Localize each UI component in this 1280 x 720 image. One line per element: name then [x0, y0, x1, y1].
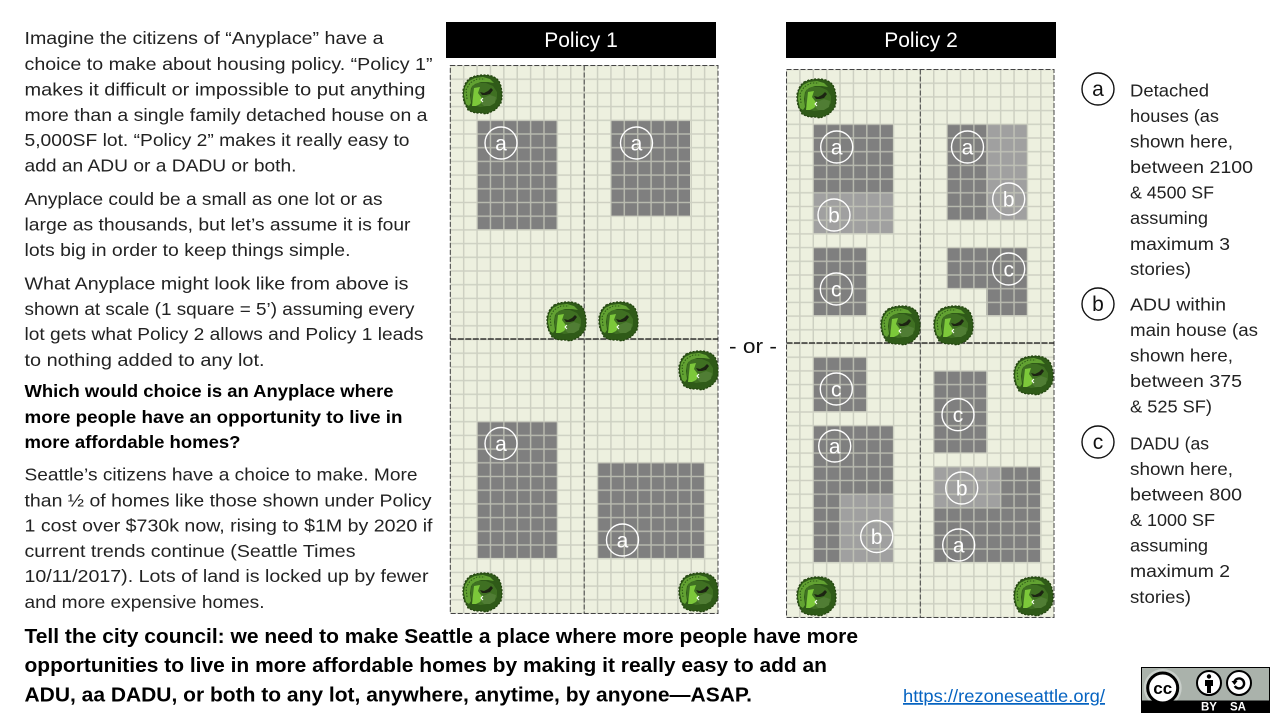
panel: Policy 1 site plan — [450, 66, 718, 614]
call to action: ADU, aa DADU, or both to any lot, anywhere, anytime, by anyone—ASAP. — [24, 684, 752, 706]
paragraph: view from above: shown at scale (1 square = 5’) assuming every — [24, 299, 415, 319]
heading: Policy 2: Policy 2 — [884, 29, 958, 52]
label c: c — [1003, 258, 1014, 282]
panel: Policy 2 site plan — [786, 70, 1054, 618]
paragraph: Seattle's choice: and more expensive homes. — [24, 592, 264, 612]
legend item b — [1082, 288, 1258, 416]
legend item c: between 800 — [1130, 484, 1242, 504]
paragraph: size of Anyplace — [24, 189, 411, 260]
bold question — [24, 381, 402, 452]
legend item a: between 2100 — [1130, 157, 1253, 177]
icon: CC BY-SA badge: BY — [1201, 702, 1217, 714]
icon: tree — [463, 75, 502, 114]
top right lot buildings — [947, 124, 1027, 315]
house a, top left lot — [477, 121, 557, 229]
legend item b: ADU within — [1130, 294, 1226, 314]
label a: a — [495, 433, 507, 456]
legend item c: shown here, — [1130, 459, 1233, 479]
legend item a: stories) — [1130, 259, 1191, 279]
paragraph: view from above: What Anyplace might look like from above is — [24, 273, 409, 293]
intro paragraph: more than a single family detached house on a — [24, 105, 428, 125]
label a: a — [953, 534, 965, 558]
icon: tree — [599, 302, 638, 341]
label b: b — [1003, 188, 1015, 212]
label b — [818, 199, 850, 231]
icon: tree — [881, 306, 920, 345]
label b: b — [871, 526, 883, 549]
intro paragraph — [24, 28, 433, 176]
legend item b: & 525 SF) — [1130, 396, 1212, 416]
label a: a — [829, 436, 841, 458]
legend item a: Detached — [1130, 81, 1209, 101]
legend item c: c — [1093, 431, 1103, 454]
icon: tree — [934, 306, 973, 345]
paragraph: Seattle's choice: 10/11/2017). Lots of land is locked up by fewer — [24, 566, 429, 586]
label a — [943, 529, 975, 561]
label a: a — [631, 132, 643, 156]
label c: c — [831, 378, 842, 402]
label a — [485, 127, 517, 159]
bottom right lot buildings — [934, 371, 1040, 562]
paragraph: Seattle's choice: current trends continue (Seattle Times — [24, 541, 356, 561]
legend item a — [1082, 73, 1253, 279]
legend item c: stories) — [1130, 587, 1191, 607]
icon: tree — [1014, 356, 1053, 395]
icon: CC BY-SA badge: SA — [1230, 702, 1246, 714]
icon: tree — [1014, 577, 1053, 616]
legend item b: between 375 — [1130, 371, 1242, 391]
label c: c — [953, 404, 963, 427]
legend item c: DADU (as — [1130, 434, 1209, 454]
heading: Policy 2 — [786, 22, 1056, 58]
label a — [819, 430, 851, 462]
label b — [993, 183, 1025, 215]
link: https://rezoneseattle.org/ — [903, 686, 1105, 706]
paragraph: view from above — [24, 273, 424, 370]
paragraph: view from above: lot gets what Policy 2 allows and Policy 1 leads — [24, 324, 424, 344]
house a, bottom left lot — [477, 422, 557, 558]
intro paragraph: Imagine the citizens of “Anyplace” have a — [24, 28, 384, 48]
label a — [606, 524, 638, 556]
paragraph: view from above: to nothing added to any lot. — [24, 350, 264, 370]
icon: tree — [679, 351, 718, 390]
paragraph: Seattle's choice: 1 cost over $730k now, rising to $1M by 2020 if — [24, 516, 433, 536]
label b: b — [828, 204, 840, 228]
icon: CC BY-SA badge — [1142, 668, 1270, 714]
label a — [620, 127, 652, 159]
heading: Policy 1 — [446, 22, 716, 58]
label b — [946, 472, 978, 504]
legend item b: shown here, — [1130, 346, 1233, 366]
paragraph: Seattle's choice — [24, 465, 433, 612]
legend item b: main house (as — [1130, 320, 1258, 340]
separator: or: - or - — [729, 336, 777, 358]
bold question: more affordable homes? — [24, 432, 240, 452]
intro paragraph: 5,000SF lot. “Policy 2” makes it really easy to — [24, 130, 410, 150]
house a, bottom right lot — [598, 463, 704, 558]
icon: tree — [797, 577, 836, 616]
call to action: Tell the city council: we need to make Seattle a place where more people have more — [24, 625, 858, 648]
paragraph: size of Anyplace: large as thousands, but let’s assume it is four — [24, 215, 411, 235]
icon: tree — [463, 573, 502, 612]
paragraph: size of Anyplace: Anyplace could be a small as one lot or as — [24, 189, 383, 209]
intro paragraph: add an ADU or a DADU or both. — [24, 156, 296, 176]
label a: a — [962, 136, 974, 160]
legend item c — [1082, 426, 1242, 607]
call to action — [24, 625, 858, 706]
bold question: more people have an opportunity to live in — [24, 407, 402, 427]
label a: a — [495, 132, 507, 156]
legend item a: a — [1092, 78, 1104, 101]
paragraph: Seattle's choice: than ½ of homes like those shown under Policy — [24, 491, 432, 511]
paragraph: Seattle's choice: Seattle’s citizens have a choice to make. More — [24, 465, 417, 485]
bottom left lot buildings — [813, 357, 893, 562]
legend item a: maximum 3 — [1130, 234, 1230, 254]
house a, top right lot — [611, 121, 690, 216]
legend item a: houses (as — [1130, 106, 1219, 126]
call to action: opportunities to live in more affordable homes by making it really easy to add an — [24, 654, 827, 677]
icon: tree — [679, 573, 718, 612]
heading: Policy 1: Policy 1 — [544, 29, 618, 52]
icon: tree — [547, 302, 586, 341]
legend item c: assuming — [1130, 536, 1208, 556]
label c — [993, 253, 1025, 285]
legend item b: b — [1092, 293, 1104, 316]
icon: CC BY-SA badge: cc — [1153, 679, 1172, 698]
label a — [821, 131, 853, 163]
label a — [952, 131, 984, 163]
label c — [820, 273, 852, 305]
paragraph: size of Anyplace: lots big in order to keep things simple. — [24, 240, 350, 260]
legend item a: assuming — [1130, 208, 1208, 228]
label a — [485, 428, 517, 460]
label a: a — [831, 136, 843, 160]
top left lot buildings — [813, 124, 893, 315]
label a: a — [617, 530, 629, 552]
bold question: Which would choice is an Anyplace where — [24, 381, 394, 401]
legend item c: maximum 2 — [1130, 561, 1230, 581]
label c — [820, 373, 852, 405]
legend item a: & 4500 SF — [1130, 182, 1214, 202]
intro paragraph: choice to make about housing policy. “Policy 1” — [24, 54, 433, 74]
label b — [861, 520, 893, 552]
legend item a: shown here, — [1130, 132, 1233, 152]
legend item c: & 1000 SF — [1130, 510, 1215, 530]
label c — [942, 399, 974, 431]
label c: c — [831, 278, 842, 302]
intro paragraph: makes it difficult or impossible to put anything — [24, 80, 426, 100]
icon: tree — [797, 79, 836, 118]
label b: b — [956, 478, 968, 500]
